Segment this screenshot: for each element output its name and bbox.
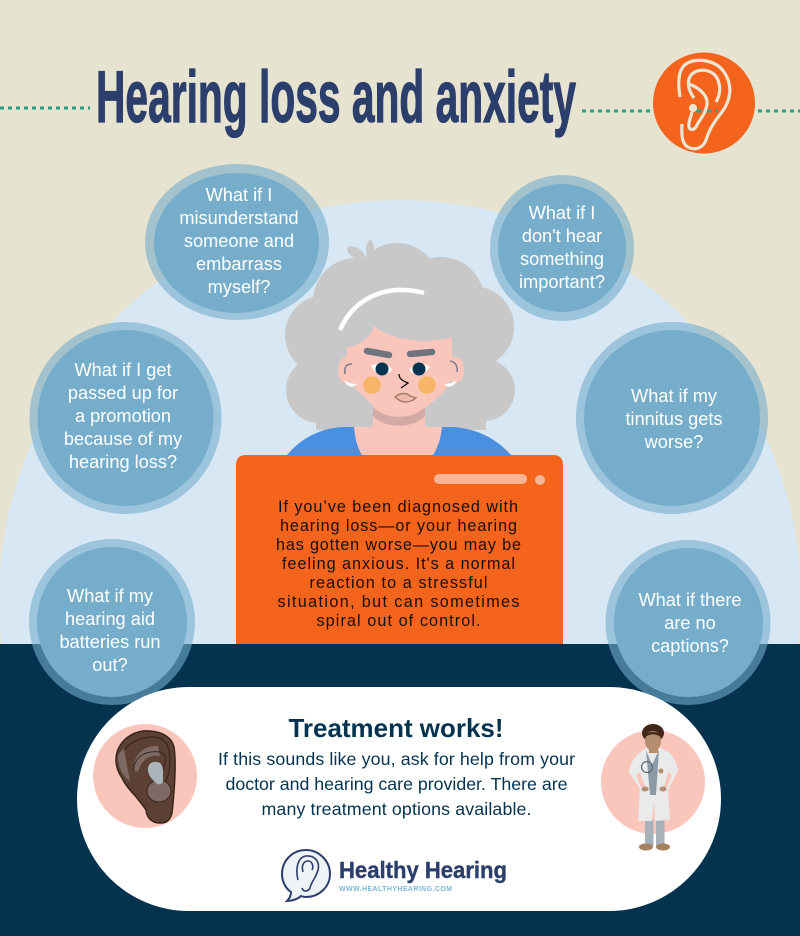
bubble: promotion: hearing loss? [69,452,177,472]
bubble: promotion: passed up for [68,383,178,403]
icon: ear with hearing aid [93,724,197,828]
bubble: captions: are no [664,613,716,633]
panel: orange text box: feeling anxious. It's a normal [282,555,515,573]
woman illustration [285,240,515,455]
bubble: promotion: a promotion [75,406,171,426]
logo: Healthy Hearing: WWW.HEALTHYHEARING.COM [339,886,452,893]
bubble: batteries: hearing aid [65,609,155,629]
panel: orange text box: reaction to a stressful [310,574,488,592]
logo: Healthy Hearing: Healthy Hearing [339,857,507,883]
bubble: misunderstand: myself? [208,277,270,297]
bubble: something important: What if I [529,203,595,223]
bubble: promotion [30,322,222,514]
bubble: misunderstand: someone and [184,231,294,251]
bubble: batteries [29,539,195,705]
bubble: something important: important? [519,272,605,292]
bubble: promotion: What if I get [74,360,172,380]
panel: orange text box: has gotten worse—you may be [276,536,521,554]
bubble: promotion: because of my [64,429,183,449]
panel: orange text box: If you’ve been diagnosed with [278,498,518,516]
bubble: tinnitus: worse? [644,432,703,452]
bubble: batteries: out? [92,655,128,675]
panel: treatment callout [77,687,721,911]
bubble: tinnitus: What if my [631,386,718,406]
panel: orange text box: spiral out of control. [316,612,480,630]
treatment text: If this sounds like you, ask for help from your [218,749,575,769]
bubble: captions: captions? [651,636,729,656]
bubble: something important: something [520,249,604,269]
bubble: misunderstand [145,164,329,320]
bubble: batteries: What if my [67,586,154,606]
bubble: misunderstand: misunderstand [179,208,299,228]
icon: doctor [601,724,705,850]
treatment text: doctor and hearing care provider. There are [226,774,568,794]
panel: orange text box [236,455,563,644]
panel: orange text box: hearing loss—or your hearing [280,517,517,535]
treatment text: many treatment options available. [262,799,532,819]
bubble: something important: don't hear [522,226,602,246]
bubble: captions: What if there [638,590,742,610]
bubble: captions [606,540,770,705]
bubble: something important [490,175,634,321]
icon: ear in orange circle [653,52,755,154]
bubble: batteries: batteries run [59,632,161,652]
panel: orange text box: situation, but can sometimes [278,593,520,611]
heading: treatment works: Treatment works! [288,713,504,743]
bubble: tinnitus [576,322,768,514]
bubble: misunderstand: What if I [206,185,272,205]
treatment text [218,749,575,819]
bubble: tinnitus: tinnitus gets [625,409,723,429]
logo: Healthy Hearing [282,850,507,901]
bubble: misunderstand: embarrass [196,254,282,274]
